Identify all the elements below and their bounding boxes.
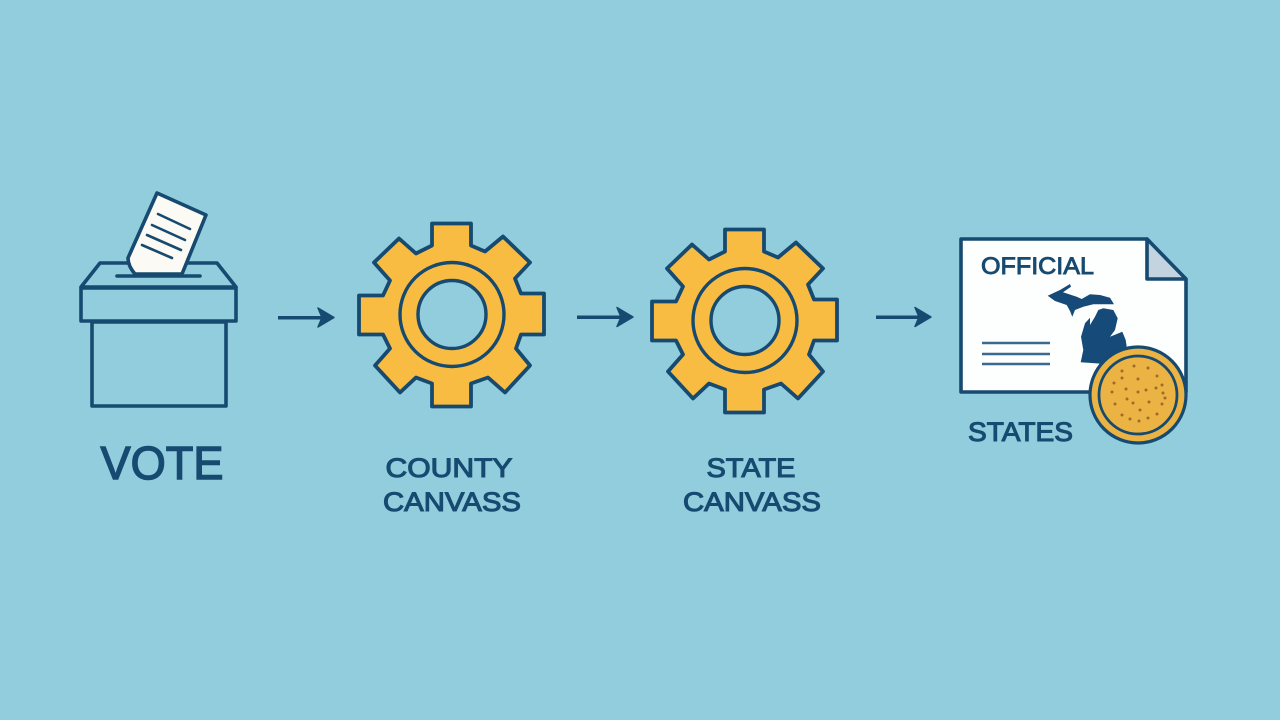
icon: state gear [652, 230, 837, 412]
label: states: STATES [968, 417, 1073, 447]
box lid top [81, 263, 236, 287]
box front band [81, 288, 236, 321]
icon: county gear [359, 224, 544, 406]
label: state canvass: STATE [706, 453, 796, 483]
label: county canvass: COUNTY [386, 453, 512, 483]
arrow 3 [876, 308, 931, 326]
label: county canvass: CANVASS [383, 487, 521, 517]
document sheet [961, 239, 1186, 392]
label: vote: VOTE [100, 437, 224, 489]
ballot slot [117, 274, 200, 278]
arrow 2 [577, 308, 633, 326]
map: michigan [1048, 284, 1127, 365]
box body [92, 322, 226, 406]
icon: ballot box [81, 193, 236, 406]
label: state canvass: CANVASS [683, 487, 821, 517]
gold seal [1090, 347, 1186, 443]
heading: official: OFFICIAL [981, 253, 1094, 280]
arrow 1 [278, 308, 334, 327]
icon: official certificate [961, 239, 1186, 443]
page fold [1147, 239, 1186, 279]
text lines [982, 343, 1050, 364]
ballot paper [128, 193, 206, 274]
label: state canvass [683, 453, 821, 517]
label: county canvass [383, 453, 521, 517]
